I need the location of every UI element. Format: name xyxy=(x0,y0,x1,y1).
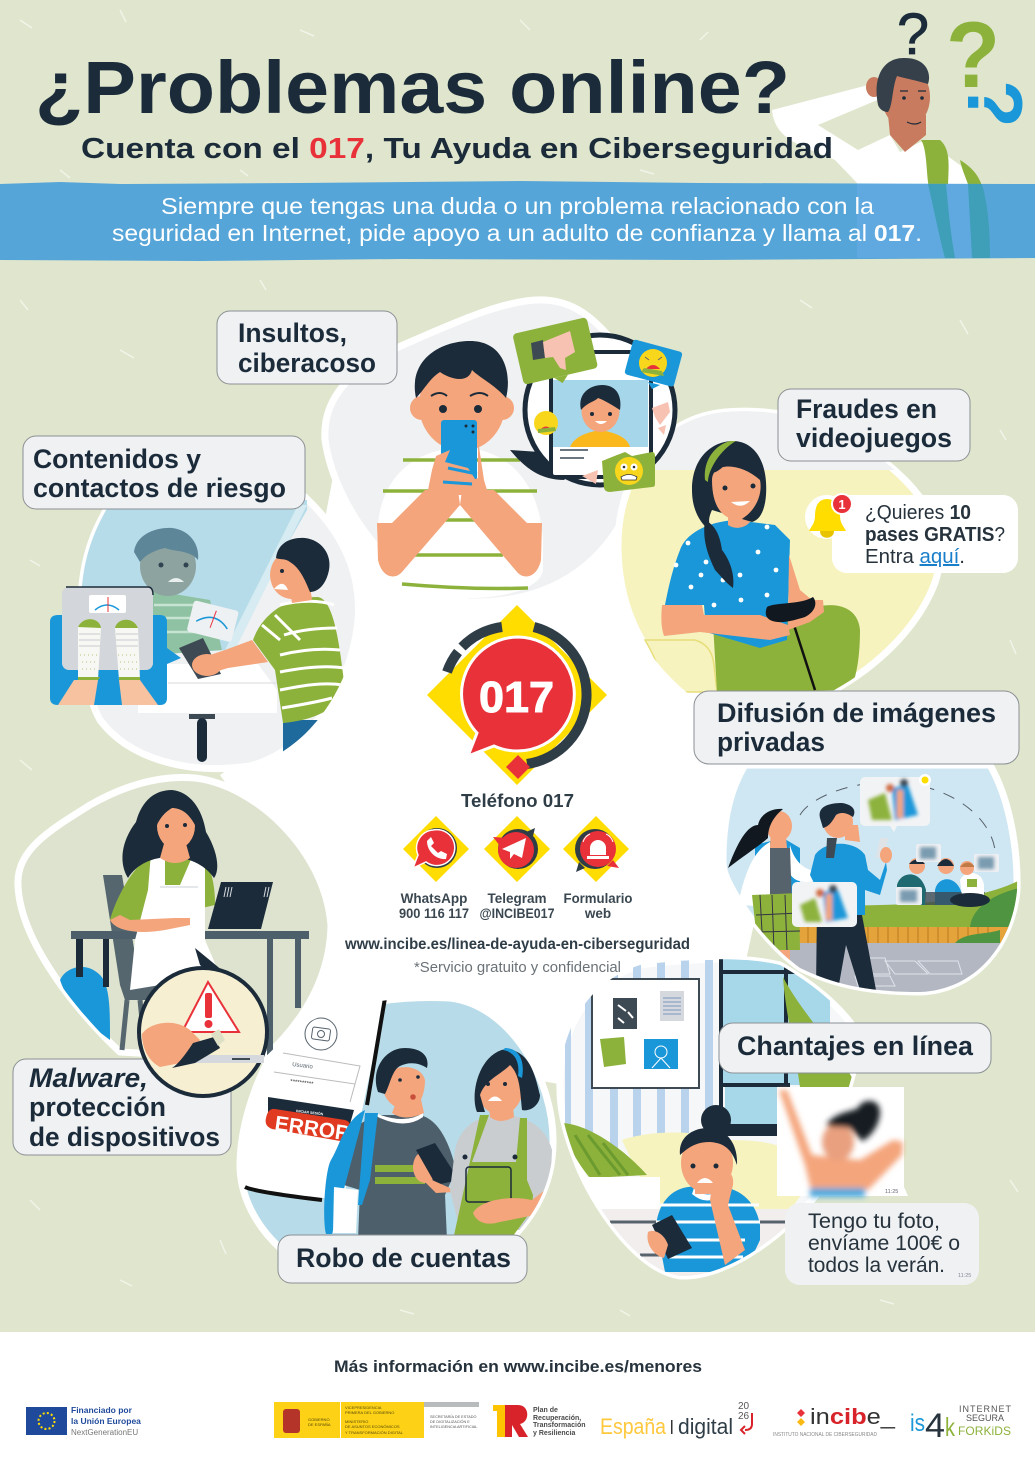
logo: Plan de Recuperación xyxy=(493,1405,586,1437)
logo: 017: 017 xyxy=(479,673,554,722)
phone login screen: INICIAR SESIÓN xyxy=(296,1108,324,1116)
heading: Insultos, ciberacoso: ciberacoso xyxy=(238,348,376,378)
icon: question marks: ? xyxy=(946,2,1000,107)
contact labels xyxy=(399,891,632,921)
logo: España digital 2026 xyxy=(600,1401,752,1439)
heading: Robo de cuentas xyxy=(278,1235,527,1283)
boy xyxy=(810,803,892,990)
phone xyxy=(179,638,221,679)
blurred photo bubble lower xyxy=(792,882,857,927)
panel: difusión de imágenes privadas xyxy=(720,765,1020,998)
footer xyxy=(0,1332,1035,1463)
girl in green apron xyxy=(450,1048,552,1240)
logo: is4k: 4 xyxy=(925,1407,945,1445)
text: free and confidential note: *Servicio gratuito y confidencial xyxy=(414,960,621,976)
icon: bell: 1 xyxy=(838,497,846,512)
girl xyxy=(728,808,814,960)
striped wall xyxy=(565,960,713,1150)
logo: Gobierno de España: PRIMERA DEL GOBIERNO xyxy=(345,1410,394,1415)
panel: chantajes en línea xyxy=(560,955,979,1285)
icon: web form alarm xyxy=(563,816,629,882)
logo: Gobierno de España: GOBIERNO xyxy=(308,1417,330,1422)
logo: España digital 2026: España xyxy=(600,1414,667,1439)
blue band xyxy=(0,181,1035,261)
heading: Insultos, ciberacoso: Insultos, xyxy=(238,318,347,348)
table xyxy=(138,664,277,713)
logo: 017 xyxy=(427,605,607,785)
heading: Chantajes en línea: Chantajes en línea xyxy=(737,1031,974,1061)
pinboard xyxy=(592,979,699,1088)
logo: is4k: is xyxy=(910,1410,925,1437)
blurred photo message: 11:25 xyxy=(885,1189,898,1195)
subtitle: Cuenta con el 017 , Tu Ayuda en Ciberseguridad xyxy=(81,133,833,165)
reaction: thumbs down xyxy=(512,317,600,392)
logo: Plan de Recuperación: Recuperación, xyxy=(533,1415,581,1422)
panel: malware xyxy=(18,777,331,1060)
heading: Difusión de imágenes privadas xyxy=(694,691,1019,764)
logo: Gobierno de España: Y TRANSFORMACIÓN DIGITAL xyxy=(345,1430,404,1435)
pants xyxy=(283,720,318,752)
speech bubble with phone post and reactions xyxy=(510,317,683,492)
window xyxy=(720,955,860,1136)
logo: EU funded: Financiado por xyxy=(71,1405,133,1415)
blurred photo bubble xyxy=(860,777,930,832)
heading: Chantajes en línea xyxy=(719,1023,991,1073)
phone login screen: ERROR xyxy=(273,1112,352,1146)
reaction: sick emoji xyxy=(534,411,558,435)
small photo cards xyxy=(896,844,999,905)
desk and chair xyxy=(71,875,309,1058)
heading: Malware, protección de dispositivos: de dispositivos xyxy=(29,1122,220,1152)
blurred photo message xyxy=(777,1087,908,1197)
sitting group xyxy=(897,858,990,907)
logo: Gobierno de España: MINISTERIO xyxy=(345,1419,368,1424)
notification: free passes xyxy=(805,494,1018,573)
threat message: todos la verán. xyxy=(808,1254,945,1277)
notification: free passes: pases GRATIS? xyxy=(865,524,1005,546)
logo: is4k: k xyxy=(945,1412,956,1442)
heading: Fraudes en videojuegos xyxy=(778,389,970,461)
park scenery xyxy=(772,784,1018,992)
logo: EU funded: la Unión Europea xyxy=(71,1416,141,1426)
logo: Gobierno de España: INTELIGENCIA ARTIFICIAL xyxy=(430,1425,477,1429)
logo: Gobierno de España: DE DIGITALIZACIÓN E xyxy=(430,1419,470,1424)
boy with phone xyxy=(377,341,543,598)
band text: Siempre que tengas una duda o un problema relacionado con la xyxy=(161,193,874,219)
logo: is4k: SEGURA xyxy=(966,1413,1004,1423)
text: url: www.incibe.es/linea-de-ayuda-en-ciberseguridad xyxy=(344,936,690,953)
notification: free passes: ¿Quieres 10 xyxy=(865,502,971,524)
logo: Plan de Recuperación: Plan de xyxy=(533,1407,558,1414)
white centre area xyxy=(220,440,770,1085)
heading: Difusión de imágenes privadas: privadas xyxy=(717,727,825,757)
panel: contenidos y contactos de riesgo xyxy=(50,497,358,769)
panel: insultos, ciberacoso xyxy=(325,300,642,602)
text: more information: Más información en www.incibe.es/menores xyxy=(334,1357,702,1376)
woman at laptop xyxy=(110,790,220,990)
title: ¿Problemas online? xyxy=(35,46,790,129)
logo: Gobierno de España: DE ASUNTOS ECONÓMICOS xyxy=(345,1424,400,1429)
laptop xyxy=(208,882,273,929)
threat message: Tengo tu foto, xyxy=(808,1210,940,1233)
phone login screen: ********** xyxy=(290,1079,314,1088)
reaction: sick emoji blue xyxy=(624,339,683,389)
boy with backpack xyxy=(324,1048,459,1240)
heading: Malware, protección de dispositivos: Malware, xyxy=(29,1063,148,1093)
heading: Fraudes en videojuegos: videojuegos xyxy=(796,423,952,453)
callout: USB warning xyxy=(139,948,267,1096)
shirt xyxy=(253,597,345,723)
logo: is4k: INTERNET xyxy=(959,1404,1012,1414)
logo: Plan de Recuperación: Transformación xyxy=(533,1422,586,1429)
logo: EU funded: NextGenerationEU xyxy=(71,1428,138,1437)
threat message xyxy=(785,1203,979,1285)
reaction: scared emoji green xyxy=(602,452,655,492)
heading: Contenidos y contactos de riesgo: Contenidos y xyxy=(33,444,201,474)
icon: question marks xyxy=(897,2,1035,128)
bell small xyxy=(919,774,931,786)
sofa xyxy=(645,640,717,692)
heading: Difusión de imágenes privadas: Difusión de imágenes xyxy=(717,698,996,728)
logo: incibe: INSTITUTO NACIONAL DE CIBERSEGURIDAD xyxy=(773,1432,877,1438)
illustration: man with question marks xyxy=(772,2,1035,190)
contact labels: web xyxy=(584,906,611,921)
man's body seen through band xyxy=(857,184,983,258)
blue bubble with scale xyxy=(50,587,181,705)
logo: Plan de Recuperación: y Resiliencia xyxy=(533,1430,576,1437)
heading: Contenidos y contactos de riesgo: contactos de riesgo xyxy=(33,473,286,503)
icon: WhatsApp xyxy=(403,816,469,882)
heading: Fraudes en videojuegos: Fraudes en xyxy=(796,394,937,424)
contact labels: WhatsApp xyxy=(401,891,467,906)
logo: Gobierno de España: SECRETARÍA DE ESTADO xyxy=(430,1415,477,1419)
logo: Gobierno de España: VICEPRESIDENCIA xyxy=(345,1405,382,1410)
logo: is4k xyxy=(910,1404,1012,1445)
band text: seguridad en Internet, pide apoyo a un adulto de confianza y llama al 017. xyxy=(112,220,922,246)
backpack xyxy=(60,967,110,1040)
arm and hand xyxy=(212,640,268,670)
logo: Gobierno de España: DE ESPAÑA xyxy=(308,1422,331,1427)
contact labels: 900 116 117 xyxy=(399,906,469,921)
girl playing xyxy=(661,441,860,692)
heading: Malware, protección de dispositivos: protección xyxy=(29,1092,166,1122)
mirror reflection xyxy=(134,528,222,655)
logo: España digital 2026: digital xyxy=(678,1414,733,1439)
icon: bell xyxy=(809,494,852,538)
phone login screen: Usuario xyxy=(292,1062,314,1071)
heading: Insultos, ciberacoso xyxy=(217,311,397,384)
heading: Malware, protección de dispositivos xyxy=(13,1059,231,1155)
panel: fraudes en videojuegos xyxy=(610,400,950,695)
logo: is4k: FORKiDS xyxy=(958,1424,1011,1438)
notification: free passes: Entra aquí. xyxy=(865,546,965,568)
logo: España digital 2026: 26 xyxy=(738,1411,750,1422)
sofa and cushion xyxy=(622,1132,805,1212)
dial bubble xyxy=(187,600,239,642)
logo: EU funded xyxy=(26,1405,141,1437)
contact labels: @INCIBE017 xyxy=(480,906,554,921)
heading: Contenidos y contactos de riesgo xyxy=(23,436,305,509)
phone login screen xyxy=(230,995,386,1200)
logo: España digital 2026: 20 xyxy=(738,1401,750,1412)
girl with phone xyxy=(647,1105,760,1272)
panel: robo de cuentas xyxy=(230,995,553,1248)
icon: question marks: ? xyxy=(897,2,929,67)
logo: Gobierno de España xyxy=(274,1402,479,1438)
boy head xyxy=(291,590,312,603)
logo: incibe: incibe_ xyxy=(810,1404,896,1429)
band text xyxy=(112,193,922,246)
threat message: envíame 100€ o xyxy=(808,1232,960,1255)
text: Teléfono 017: Teléfono 017 xyxy=(461,791,574,811)
contact labels: Telegram xyxy=(487,891,547,906)
contact labels: Formulario xyxy=(564,891,632,906)
logo: incibe xyxy=(773,1404,896,1438)
icon: Telegram xyxy=(484,816,550,882)
threat message: 11:25 xyxy=(958,1273,971,1279)
heading: Robo de cuentas: Robo de cuentas xyxy=(296,1243,511,1273)
